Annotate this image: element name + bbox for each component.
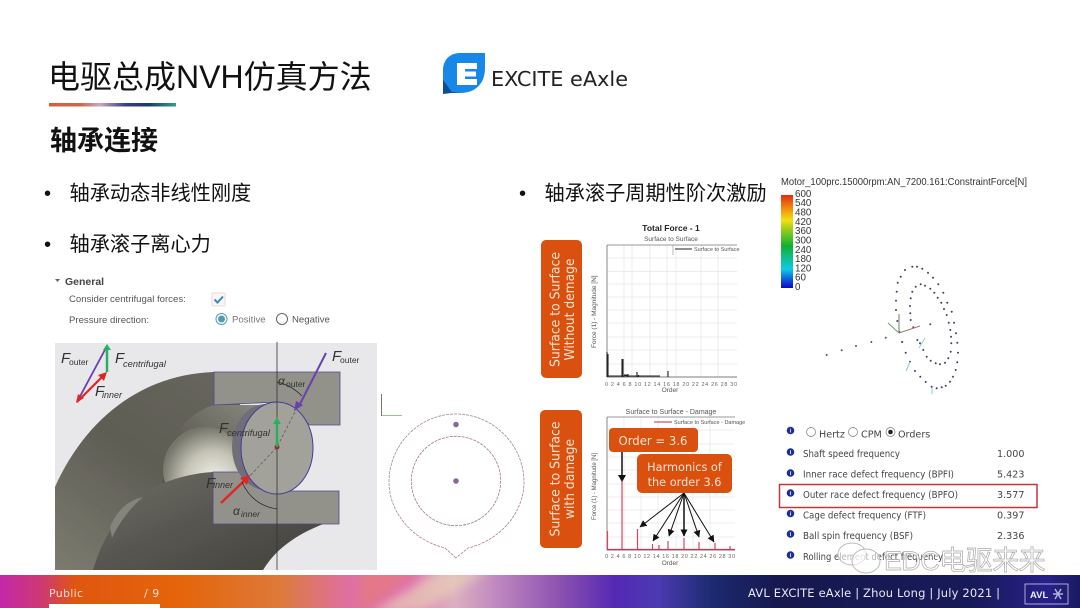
settings panel: general: [55, 276, 330, 326]
chart title: Surface to Surface - Damage: [626, 409, 716, 416]
section heading: 轴承连接: [50, 126, 158, 156]
frequency table: [787, 427, 1024, 563]
ball cross-section: [232, 404, 300, 490]
row: FTF: Cage defect frequency (FTF): [803, 510, 926, 522]
spectrum: [608, 478, 730, 550]
row: BSF: 2.336: [997, 531, 1024, 542]
row: FTF: [787, 510, 1024, 522]
chart: total force without damage: Order: [662, 387, 679, 394]
radio positive: [216, 314, 266, 326]
contact line: [247, 410, 296, 479]
radio negative: [276, 314, 330, 326]
footer: page number: / 9: [144, 587, 160, 600]
constraint node plot: [826, 266, 959, 394]
callout: harmonics: the order 3.6: [648, 476, 721, 489]
label: without damage: Without demage: [563, 258, 578, 360]
center dot: [274, 444, 280, 450]
bullet right: 轴承滚子周期性阶次激励: [544, 182, 767, 205]
settings panel: general: Consider centrifugal forces:: [69, 294, 186, 305]
icon: chat bubbles: [838, 543, 880, 573]
row: shaft speed: [787, 448, 1024, 460]
center nodes: [453, 422, 459, 427]
AVL logo: AVL: [1030, 590, 1048, 601]
legend labels: 420: [795, 217, 812, 228]
watermark text: EDC电驱来来: [884, 546, 1046, 576]
row: shaft speed: Shaft speed frequency: [803, 449, 900, 460]
icon: E logo: [443, 53, 485, 94]
force labels: [61, 348, 360, 519]
angle arcs: [277, 382, 302, 396]
force labels: F: [61, 350, 71, 367]
row: BSF: Ball spin frequency (BSF): [803, 531, 913, 542]
outer node loop: [895, 266, 959, 389]
heading: constraint force: Motor_100prc.15000rpm:AN_7200.161:ConstraintForce[N]: [781, 177, 1027, 188]
footer: presentation info: AVL EXCITE eAxle | Zhou Long | July 2021 |: [748, 586, 1000, 600]
legend labels: [795, 189, 812, 293]
label: with damage: Surface to Surface: [548, 422, 564, 536]
force labels: centrifugal: [123, 359, 167, 369]
EXCITE eAxle logo: [443, 53, 628, 94]
force labels: inner: [241, 509, 261, 519]
radio positive: Positive: [232, 314, 266, 326]
highlight box: [780, 484, 1037, 508]
force labels: outer: [69, 357, 89, 367]
footer band: [0, 575, 1080, 608]
callout: order 3.6: [609, 428, 698, 452]
force labels: inner: [213, 480, 234, 490]
row: BPFI: [787, 469, 1024, 480]
axes: [607, 245, 737, 377]
callout: order 3.6: Order = 3.6: [618, 433, 688, 448]
arrow: centrifugal inner: [273, 417, 281, 447]
force labels: α: [278, 374, 286, 388]
row: shaft speed: i: [790, 450, 792, 456]
inner race torus: [93, 472, 323, 570]
legend labels: 120: [795, 264, 812, 274]
row: FTF: i: [790, 512, 792, 518]
legend labels: 360: [795, 226, 812, 237]
logo text: EXCITE eAxle: [491, 67, 628, 91]
chart: total force without damage: Surface to Surface: [644, 236, 698, 243]
chart: surface with damage: [592, 409, 745, 567]
color bar: [781, 195, 793, 288]
ball: [163, 427, 247, 513]
callout: harmonics: Harmonics of: [647, 461, 723, 474]
chart: total force without damage: [591, 223, 740, 394]
callout: harmonics: [637, 454, 732, 493]
unit selector: Hertz: [819, 430, 845, 440]
bullet 1: 轴承动态非线性刚度: [70, 182, 251, 205]
mesh axis and ring plot: [382, 394, 524, 558]
grid: [607, 245, 737, 377]
axis text: Force (1) - Magnitude [N]: [592, 453, 598, 520]
legend: Surface to Surface - Damage: [674, 420, 745, 426]
row: BPFO: 3.577: [997, 490, 1024, 501]
legend labels: 60: [795, 272, 806, 284]
force labels: F: [332, 348, 342, 365]
force labels: outer: [286, 379, 306, 389]
bore shading: [163, 405, 262, 485]
unit selector: [787, 427, 930, 440]
row: BPFI: 5.423: [997, 470, 1024, 480]
arrow: order 3.6: [618, 452, 626, 482]
row: rolling: Rolling element defect frequency: [803, 552, 943, 563]
force labels: F: [95, 383, 105, 400]
label: without damage: Surface to Surface: [548, 252, 564, 367]
inner node loop: [909, 283, 952, 365]
label: without damage: [541, 240, 582, 378]
axis text: Force (1) - Magnitude [N]: [591, 275, 598, 348]
AVL logo: [1025, 584, 1068, 604]
second ball: [110, 497, 143, 538]
bullet list left: [44, 182, 251, 256]
vertical axis: [276, 342, 278, 570]
diagram background: [55, 343, 377, 570]
footer: white bar: [49, 604, 160, 608]
unit selector: CPM: [861, 430, 882, 440]
watermark: [838, 543, 1046, 576]
chart: surface with damage: Order: [662, 560, 679, 567]
upper section block: [214, 372, 340, 425]
force labels: α: [233, 504, 241, 518]
tail nodes: [826, 323, 931, 356]
bullet 2: 轴承滚子离心力: [70, 233, 211, 256]
spectrum: [607, 352, 668, 377]
outer ring: [389, 414, 524, 558]
legend labels: 180: [795, 254, 812, 265]
title: 电驱总成NVH仿真方法: [48, 59, 372, 95]
row: FTF: 0.397: [997, 510, 1024, 522]
checkbox: [212, 293, 225, 306]
label: with damage: with damage: [563, 439, 578, 519]
bullet 2: •: [44, 234, 51, 256]
axis triad: [888, 314, 920, 333]
lower section block: [213, 472, 339, 524]
chart: total force without damage: 0 2 4 6 8 10 12 14 16 18 20 22 24 26 28 30: [605, 382, 737, 388]
row: BPFO: Outer race defect frequency (BPFO): [803, 490, 958, 501]
axis triad: [382, 414, 402, 416]
legend labels: 540: [795, 198, 812, 209]
legend labels: 300: [795, 236, 812, 246]
legend labels: 0: [795, 282, 801, 293]
row: BPFO: [787, 489, 1024, 501]
row: BSF: i: [790, 532, 792, 538]
grid: [607, 417, 735, 550]
force labels: outer: [340, 355, 360, 365]
row: BSF: [787, 530, 1024, 542]
bearing force diagram: [55, 342, 377, 570]
title underline gradient: [49, 103, 176, 106]
row: BPFI: Inner race defect frequency (BPFI): [803, 470, 954, 480]
force labels: centrifugal: [227, 428, 271, 438]
force labels: F: [219, 420, 229, 437]
label: with damage: [540, 410, 582, 548]
bullet right: •: [519, 183, 526, 205]
outer race torus: [55, 372, 323, 570]
settings panel: general: Pressure direction:: [69, 315, 149, 326]
legend: Surface to Surface: [694, 247, 740, 253]
row: shaft speed: 1.000: [997, 449, 1024, 460]
row: rolling: i: [790, 553, 792, 559]
arrow: outer force: [294, 353, 326, 411]
axes: [607, 417, 735, 550]
teal force bars: [906, 338, 932, 394]
settings panel: general: General: [65, 276, 104, 288]
force labels: F: [206, 475, 216, 492]
chart titles: Total Force - 1: [642, 223, 700, 233]
unit selector: i: [790, 428, 792, 434]
footer: public: Public: [49, 587, 83, 600]
legend labels: 600: [795, 189, 812, 200]
row: BPFO: i: [790, 491, 792, 497]
color legend: [781, 189, 812, 293]
force labels: inner: [102, 390, 123, 400]
arrows: harmonics: [640, 493, 714, 542]
arrow: inner force: [221, 475, 250, 503]
legend labels: 480: [795, 208, 812, 218]
inner ring: [411, 436, 501, 526]
force labels: F: [115, 350, 125, 367]
radio negative: Negative: [292, 314, 330, 326]
unit selector: Orders: [898, 430, 930, 440]
chart: surface with damage: 0 2 4 6 8 10 12 14 16 18 20 22 24 26 28 30: [605, 554, 735, 560]
bullet 1: •: [44, 183, 51, 205]
row: BPFI: i: [790, 471, 792, 477]
force triangle: [76, 344, 111, 403]
legend labels: 240: [795, 245, 812, 256]
